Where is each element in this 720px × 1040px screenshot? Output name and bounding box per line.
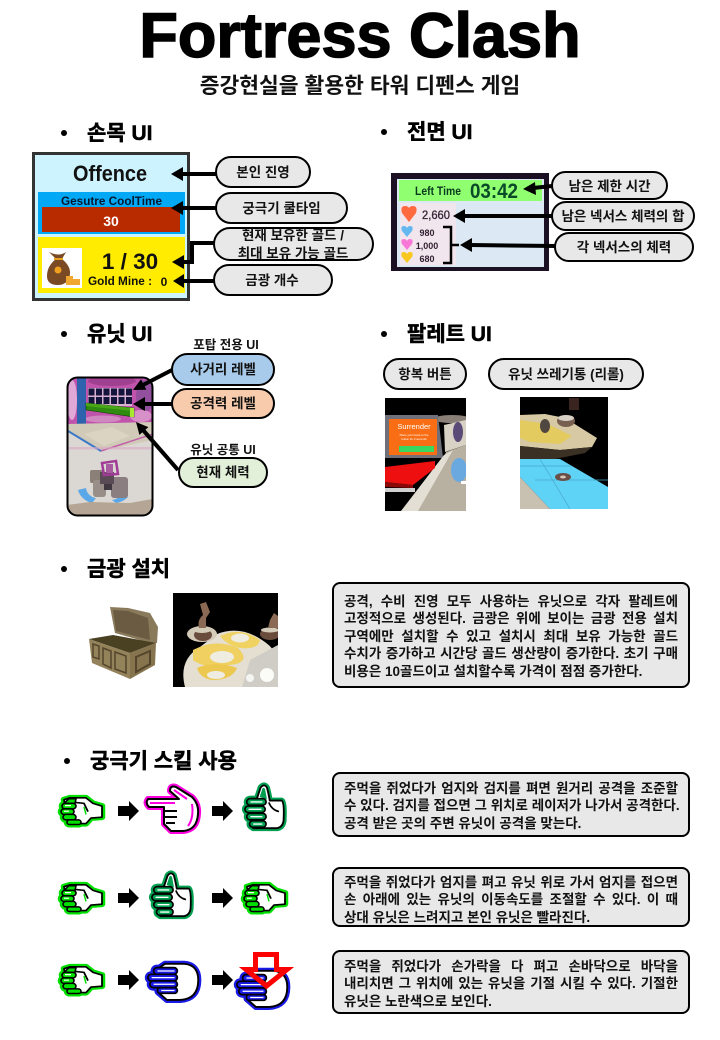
cooldown bar <box>38 192 185 234</box>
gold area: 1 / 30 <box>102 249 158 274</box>
arrow <box>118 970 139 990</box>
heading: gold mine install: 금광 설치 <box>87 558 170 581</box>
heading: unit UI: 유닛 UI <box>87 323 152 346</box>
text block: gold mine description <box>332 582 690 688</box>
subtitle: 증강현실을 활용한 타워 디펜스 게임 <box>200 74 520 98</box>
icon: thumb up <box>152 873 191 916</box>
callout: faction <box>216 157 310 187</box>
text block: gold mine description: 구역에만 설치할 수 있고 설치시 최대 보유 가능한 골드 <box>344 629 678 644</box>
callout: gold: 현재 보유한 골드 / <box>242 228 344 243</box>
arrow <box>118 888 139 908</box>
arrow: faction <box>171 167 216 181</box>
health list <box>400 203 456 265</box>
arrow: cooldown <box>171 201 216 215</box>
heading: front UI: 전면 UI <box>407 121 472 144</box>
callout: cooldown <box>216 193 347 223</box>
arrow: total health <box>453 209 553 223</box>
gold area: Gold Mine : <box>88 274 152 288</box>
callout: gold mine count: 금광 개수 <box>245 273 299 288</box>
timer <box>399 180 542 203</box>
icon: open hand <box>148 964 198 1000</box>
icon: open hand slamming <box>237 971 287 1007</box>
callout: attack level: 공격력 레벨 <box>190 396 256 411</box>
text block: gold mine description: 수치가 증가하고 시간당 골드 생산량이 증가한다. 초기 구매 <box>344 646 678 661</box>
icon: fist <box>61 798 102 825</box>
cooldown bar: Gesutre CoolTime <box>61 196 162 208</box>
text block: ultimate skill 3: 유닛은 노란색으로 보인다. <box>344 994 492 1009</box>
icon: fist <box>61 885 102 912</box>
heading: ultimate skill use: 궁극기 스킬 사용 <box>90 750 237 773</box>
faction label: Offence <box>73 161 147 186</box>
callout: cooldown: 궁극기 쿨타임 <box>242 201 321 216</box>
arrow <box>212 888 233 908</box>
arrow <box>212 801 233 821</box>
callout: current health: 현재 체력 <box>196 465 250 480</box>
callout: gold <box>214 228 373 261</box>
callout: each nexus health <box>555 233 693 261</box>
callout: current health <box>179 458 267 487</box>
callout: attack level <box>172 389 274 418</box>
health bar <box>86 403 134 417</box>
label: turret only UI: 포탑 전용 UI <box>193 338 259 352</box>
icon: fist <box>244 885 285 912</box>
arrow: gold <box>172 243 214 269</box>
arrow: range level <box>133 370 172 390</box>
image: gold mine screenshot <box>173 593 280 687</box>
callout: surrender button: 항복 버튼 <box>398 367 452 382</box>
health list: 980 <box>419 228 435 238</box>
health list: 2,660 <box>422 208 450 222</box>
callout: gold mine count <box>214 265 332 295</box>
heading: wrist UI: 손목 UI <box>87 122 152 145</box>
text block: gold mine description: 고정적으로 생성된다. 금광은 위에 보이는 금광 전용 설치 <box>344 611 678 626</box>
label: unit common UI: 유닛 공통 UI <box>190 443 256 457</box>
arrow <box>212 970 233 990</box>
callout: unit trash can: 유닛 쓰레기통 (리롤) <box>508 367 624 382</box>
gold area: 0 <box>161 275 168 289</box>
text block: ultimate skill 1: 공격 받은 곳의 주변 유닛이 공격을 맞는다. <box>344 816 581 831</box>
upgrade grid <box>88 388 132 406</box>
icon: fist <box>61 967 102 994</box>
bracket <box>443 227 459 263</box>
cooldown bar: 30 <box>103 213 119 229</box>
text block: ultimate skill 1 <box>332 772 690 837</box>
callout: faction: 본인 진영 <box>236 165 290 180</box>
tank <box>90 461 128 498</box>
text block: ultimate skill 3: 주먹을 쥐었다가 손가락을 다 펴고 손바닥으로 바닥을 <box>344 959 678 974</box>
arrow: timer <box>523 182 552 195</box>
callout: surrender button <box>384 359 466 389</box>
image: surrender screenshot: Place your hand on the <box>400 433 429 437</box>
text block: ultimate skill 3 <box>332 950 690 1014</box>
text block: ultimate skill 1: 수 있다. 검지를 접으면 그 위치로 레이저가 나가서 공격한다. <box>344 798 680 813</box>
callout: time left <box>552 172 667 199</box>
text block: ultimate skill 2 <box>332 867 690 927</box>
callout: total nexus health <box>552 202 694 230</box>
text block: ultimate skill 2: 상대 유닛은 느려지고 본인 유닛은 빨라진다. <box>344 910 590 925</box>
health list: 680 <box>419 254 435 264</box>
gesture row 2 <box>61 873 285 916</box>
timer: 03:42 <box>470 180 518 203</box>
icon: pointing hand <box>147 786 198 831</box>
icon: thumb up <box>245 785 284 828</box>
timer: Left Time <box>415 186 461 198</box>
callout: total nexus health: 남은 넥서스 체력의 합 <box>561 209 685 224</box>
title: Fortress Clash <box>139 1 581 71</box>
callout: unit trash can <box>489 359 643 389</box>
health list: 1,000 <box>416 241 438 251</box>
gold area <box>38 237 185 293</box>
image: trash can screenshot <box>520 397 608 509</box>
text block: ultimate skill 2: 주먹을 쥐었다가 엄지를 펴고 유닛 위로 가서 엄지를 접으면 <box>344 875 678 890</box>
panel: wrist UI <box>34 154 188 300</box>
gesture row 1 <box>61 785 284 831</box>
image: surrender screenshot: Surrender <box>397 422 431 431</box>
text block: gold mine description: 공격, 수비 진영 모두 사용하는 유닛으로 각자 팔레트에 <box>344 594 678 609</box>
image: surrender screenshot: button for 3 seconds <box>401 437 427 441</box>
image: treasure chest <box>89 607 158 679</box>
callout: time left: 남은 제한 시간 <box>568 179 651 194</box>
text block: ultimate skill 3: 내리치면 그 위치에 있는 유닛을 기절 시킬 수 있다. 기절한 <box>344 976 678 991</box>
heading: palette UI: 팔레트 UI <box>407 323 492 346</box>
icon: red down arrow <box>246 954 287 986</box>
text block: ultimate skill 2: 손 아래에 있는 유닛의 이동속도를 조절할 수 있다. 이 때 <box>344 892 678 907</box>
callout: range level <box>172 354 274 385</box>
arrow: attack level <box>133 397 172 411</box>
arrow: gold mine <box>173 274 214 288</box>
arrow: current health <box>136 422 178 470</box>
panel: unit UI screenshot <box>67 376 154 517</box>
callout: each nexus health: 각 넥서스의 체력 <box>577 240 671 255</box>
arrow: each nexus health <box>460 238 556 252</box>
gesture row 3 <box>61 954 287 1007</box>
callout: gold: 최대 보유 가능 골드 <box>238 246 348 261</box>
arrow <box>118 801 139 821</box>
callout: range level: 사거리 레벨 <box>190 362 256 377</box>
text block: gold mine description: 비용은 10골드이고 설치할수록 가격이 점점 증가한다. <box>344 664 642 679</box>
panel: front UI <box>391 173 549 271</box>
text block: ultimate skill 1: 주먹을 쥐었다가 엄지와 검지를 펴면 원거리 공격을 조준할 <box>344 781 678 796</box>
image: surrender screenshot <box>385 398 470 511</box>
